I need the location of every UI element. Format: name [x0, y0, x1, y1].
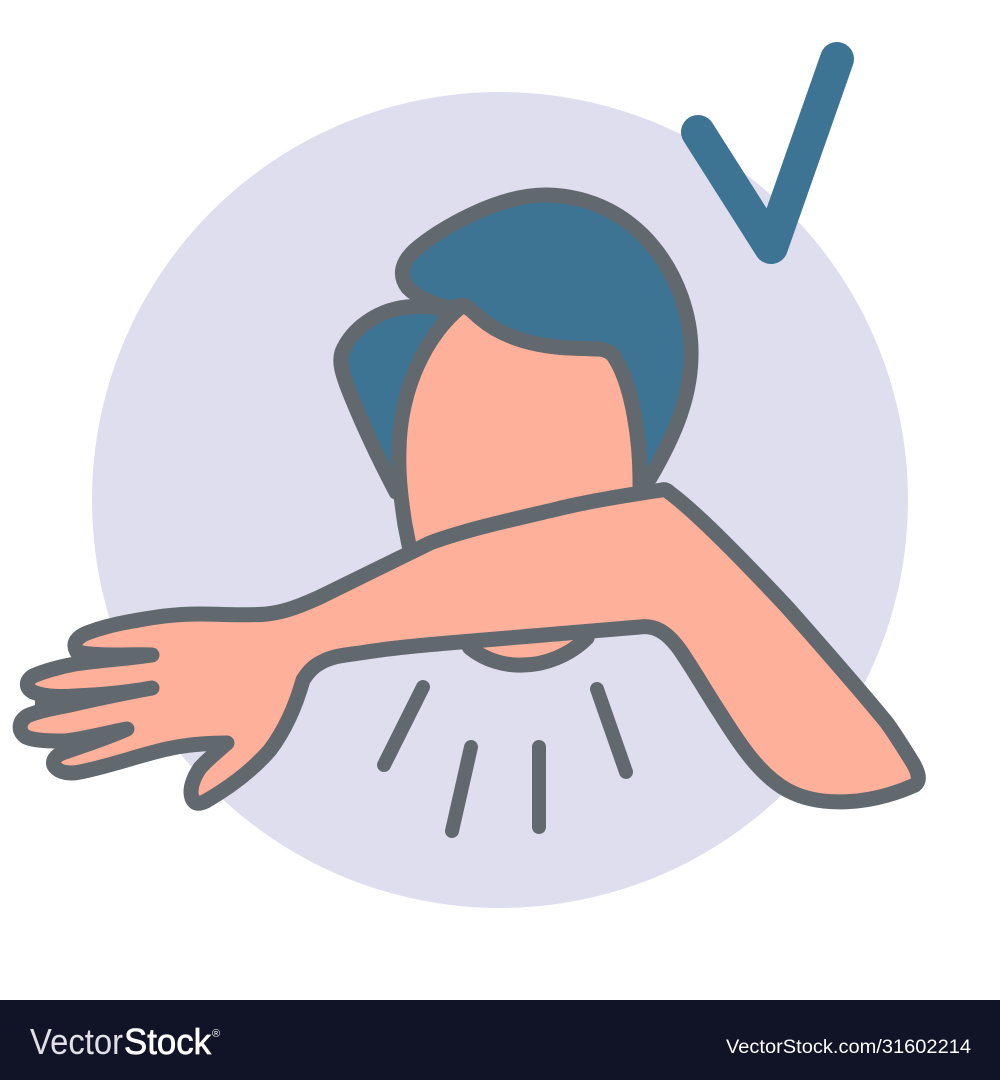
registered mark: ® — [212, 1028, 220, 1040]
arm and hand covering the face — [20, 490, 918, 803]
background circle — [92, 92, 908, 908]
face — [399, 305, 640, 665]
watermark footer bar — [0, 1000, 1000, 1080]
person head — [341, 195, 691, 665]
brand name: Vector — [30, 1021, 123, 1062]
finger gaps — [35, 688, 152, 754]
brand name bold part: Stock — [124, 1021, 212, 1062]
icon: check mark — [698, 59, 837, 247]
back hair — [341, 306, 447, 492]
cough lines — [384, 687, 626, 831]
front hair — [402, 195, 691, 484]
image id: VectorStock.com/31602214 — [726, 1037, 971, 1058]
